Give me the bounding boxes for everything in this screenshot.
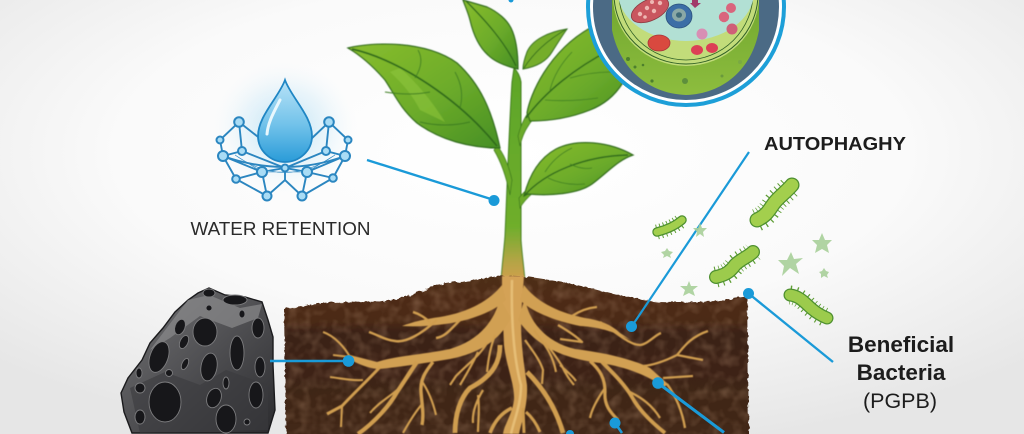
- bacterium 4: [790, 295, 827, 318]
- taproot: [502, 276, 527, 434]
- nucleus: [666, 4, 692, 28]
- cell cylinder: [612, 0, 759, 95]
- chloroplast oval: [630, 0, 670, 24]
- label: water retention: WATER RETENTION: [190, 219, 370, 239]
- bacteria and signal stars: [657, 185, 832, 318]
- medium branches: [358, 362, 417, 434]
- callout lines: [270, 0, 833, 434]
- soil cross-section: [280, 270, 755, 434]
- callout: lower middle root: [610, 418, 622, 433]
- leaf: large left: [348, 44, 500, 148]
- fine twigs: [323, 332, 436, 433]
- hydrogel network: [220, 122, 348, 196]
- callout: bottom dot: [566, 430, 574, 434]
- upper lateral right: [520, 285, 632, 341]
- inset: plant cell in circular lens: [588, 0, 784, 105]
- main lateral left: [350, 298, 511, 369]
- upper lateral left: [402, 285, 506, 326]
- label: autophagy: AUTOPHAGHY: [764, 133, 907, 154]
- callout: biochar: [270, 355, 354, 367]
- callout: top stub: [508, 0, 514, 2]
- water drop: [258, 80, 312, 162]
- roots: [323, 276, 708, 434]
- leaf: upper right: [526, 28, 640, 121]
- callout: lower right root: [652, 377, 724, 432]
- bacterium 1: [757, 185, 792, 220]
- plant: stem and leaves: [348, 0, 640, 282]
- ring: [588, 0, 784, 105]
- label: beneficial bacteria: [848, 332, 954, 413]
- label: beneficial bacteria: Bacteria: [857, 360, 946, 385]
- leaf: lower right: [524, 143, 633, 196]
- stars: [661, 223, 832, 296]
- main lateral right: [518, 298, 668, 387]
- leaf: small upper: [523, 29, 567, 69]
- stem: [494, 68, 534, 282]
- water retention icon: [213, 62, 357, 200]
- label: beneficial bacteria: Beneficial: [848, 332, 954, 357]
- glow: [213, 62, 357, 194]
- callout: beneficial bacteria: [743, 288, 833, 362]
- bacterium 3: [716, 252, 753, 277]
- biochar rock: [121, 288, 275, 433]
- leaf: top: [463, 0, 518, 69]
- organelles: [690, 0, 701, 8]
- bacterium 2: [657, 220, 682, 232]
- label: beneficial bacteria: (PGPB): [863, 389, 937, 413]
- callout: plant to water retention: [367, 160, 500, 206]
- callout: autophagy: [626, 152, 749, 332]
